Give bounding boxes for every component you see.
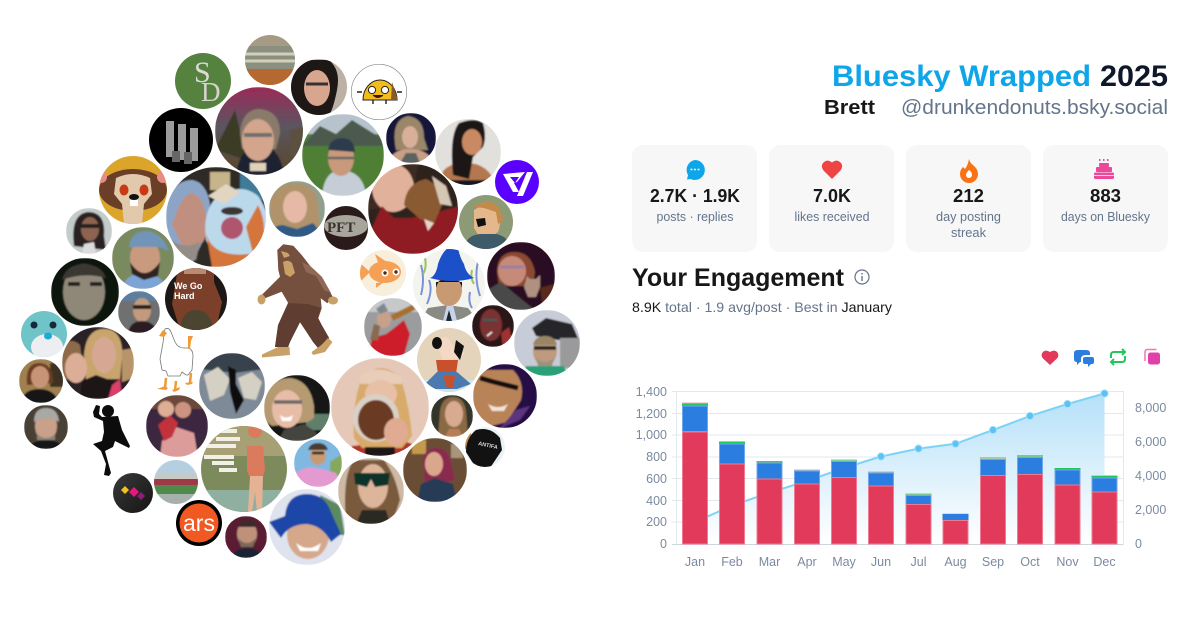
bar: Nov (1054, 468, 1080, 544)
engagement chart (636, 385, 1166, 569)
avatar: stadium (154, 460, 198, 504)
stat card: likes received (769, 145, 894, 252)
bar: Jul (906, 494, 932, 544)
avatar: red haired woman (403, 438, 467, 502)
month labels: May (832, 555, 857, 569)
avatar: goldfish (360, 250, 406, 296)
avatar: dark haired woman (435, 119, 501, 186)
avatar cloud (19, 35, 580, 565)
avatar: Darth Vader pin-up silhouette (93, 405, 130, 476)
stat card: day posting streak (906, 145, 1031, 252)
avatar: We Go Hard: Hard (174, 291, 195, 301)
avatar: woman under aurora (215, 87, 305, 175)
avatar: Underdog cartoon (417, 328, 481, 392)
avatar: blonde woman (386, 113, 436, 163)
avatar: two blonde women (62, 327, 134, 399)
avatar: We Go Hard (165, 268, 227, 330)
avatar: SD monogram (175, 53, 231, 109)
line markers (877, 390, 1108, 460)
bar: May (831, 460, 857, 544)
avatar: white goose (157, 328, 193, 392)
month labels: Jun (871, 555, 891, 569)
stat card: days on Bluesky (1043, 145, 1168, 252)
left axis labels (636, 385, 667, 551)
stat card: likes received: likes received (794, 210, 870, 224)
title: 2025 (1100, 60, 1168, 93)
bar: Aug (942, 514, 968, 544)
avatar: young woman (431, 395, 473, 437)
icon: legend likes (1042, 351, 1058, 365)
right axis labels: 2,000 (1135, 503, 1166, 517)
bar: Jan (682, 402, 708, 544)
right axis labels: 4,000 (1135, 469, 1166, 483)
avatar: smiling man purple light (473, 364, 537, 428)
bar: Oct (1017, 455, 1043, 544)
avatar: ars logo: ars (183, 510, 215, 536)
stat card: posts and replies: 2.7K · 1.9K (650, 186, 740, 206)
left axis labels: 600 (646, 472, 667, 486)
left axis labels: 1,000 (636, 428, 667, 442)
bar: Sep (980, 457, 1006, 544)
avatar: man and cat (487, 242, 555, 310)
month labels: Feb (721, 555, 743, 569)
month labels: Aug (944, 555, 967, 569)
icon: speech bubble (687, 160, 705, 180)
stat card: likes received: 7.0K (813, 186, 851, 206)
stat card: posts and replies: posts · replies (656, 210, 734, 224)
avatar: SD monogram: S (194, 56, 211, 89)
title: Bluesky Wrapped (832, 60, 1091, 93)
icon: heart (822, 161, 842, 179)
stat card: day posting streak: streak (951, 226, 987, 240)
avatar: blonde woman in denim (269, 181, 325, 237)
avatar: cartoon man (459, 195, 513, 249)
heading: Your Engagement: Your Engagement (632, 264, 845, 292)
avatar: drinking in red coat (364, 298, 422, 356)
avatar: retro pin-up meme (201, 424, 287, 512)
avatar: man in blue hat (269, 489, 345, 565)
bar: Feb (719, 441, 745, 544)
chart legend (1042, 349, 1160, 367)
left axis labels: 1,400 (636, 385, 667, 399)
month labels: Oct (1020, 555, 1040, 569)
icon: flame (960, 159, 978, 183)
bar: Mar (756, 461, 782, 544)
stat card: days on Bluesky: 883 (1090, 186, 1121, 206)
avatar: man with clown statue (166, 167, 270, 267)
avatar: man in cap (112, 227, 174, 289)
avatar: stone art (199, 353, 265, 419)
right axis labels (1135, 401, 1166, 551)
left axis labels: 800 (646, 450, 667, 464)
icon: cake (1094, 159, 1114, 179)
month labels: Jan (685, 555, 705, 569)
avatar: woman in big sunglasses (338, 458, 404, 524)
right axis labels: 0 (1135, 537, 1142, 551)
icon: info (855, 270, 869, 284)
stat card: posts and replies (632, 145, 757, 252)
left axis labels: 1,200 (636, 407, 667, 421)
avatar: cartoon rat (95, 156, 169, 224)
left axis labels: 0 (660, 537, 667, 551)
month labels: Mar (759, 555, 780, 569)
avatar: man in floral shirt (294, 439, 342, 487)
avatar: man in mountains (302, 114, 384, 196)
icon: legend replies (1074, 350, 1094, 367)
avatar: smiling woman with glasses (264, 375, 330, 441)
avatar: sepia portrait (51, 258, 119, 326)
avatar: PFT badge (324, 206, 368, 250)
stat card: days on Bluesky: days on Bluesky (1061, 210, 1151, 224)
avatar: bigfoot illustration (258, 244, 338, 358)
month labels: Nov (1056, 555, 1079, 569)
month labels: Dec (1093, 555, 1116, 569)
avatar: older woman (19, 359, 64, 403)
profile name and handle: @drunkendonuts.bsky.social (901, 97, 1168, 119)
avatar: PFT badge: PFT (327, 220, 355, 236)
stat card: day posting streak: day posting (936, 210, 1001, 224)
icon: legend quotes (1145, 350, 1160, 364)
month labels: Sep (982, 555, 1004, 569)
month labels: Jul (911, 555, 926, 569)
engagement summary: 8.9K total · 1.9 avg/post · Best in January (632, 299, 892, 315)
avatar: bearded man with glasses (225, 516, 267, 558)
avatar: building (245, 35, 295, 85)
avatar: black hat (465, 427, 505, 468)
left axis labels: 200 (646, 515, 667, 529)
cumulative line (695, 394, 1104, 522)
avatar: woman in sunglasses (66, 208, 112, 254)
bar: Jun (868, 472, 894, 544)
avatar: blue bear (21, 311, 67, 360)
avatar: man with statue (514, 310, 580, 376)
avatar: SD monogram: D (201, 77, 220, 107)
avatar: woman with dog (368, 164, 460, 254)
cumulative area (695, 394, 1104, 544)
avatar: blonde woman with mug (331, 358, 429, 456)
icon: legend reposts (1111, 349, 1125, 365)
month labels: Apr (797, 555, 817, 569)
avatar: ars logo (176, 500, 222, 546)
avatar: taco (351, 64, 407, 120)
avatar: We Go Hard: We Go (174, 281, 203, 291)
avatar: man in sunglasses (118, 291, 160, 333)
avatar: grey haired man (24, 405, 68, 449)
left axis labels: 400 (646, 494, 667, 508)
avatar: black W logo (149, 108, 213, 172)
stacked bars (682, 402, 1118, 544)
avatar: woman with cigarette (472, 305, 514, 347)
right axis labels: 6,000 (1135, 435, 1166, 449)
right axis labels: 8,000 (1135, 401, 1166, 415)
avatar: diamonds logo (113, 473, 153, 513)
avatar: black hat: ANTIFA (478, 441, 498, 451)
avatar: woman with glasses (291, 59, 347, 115)
avatar: mother and child (146, 395, 208, 457)
stat card: day posting streak: 212 (953, 186, 984, 206)
bar: Dec (1092, 475, 1118, 544)
bar: Apr (794, 470, 820, 544)
avatar: man in party hat (413, 248, 485, 321)
profile name and handle: Brett (824, 97, 875, 119)
avatar: purple V logo (495, 160, 539, 204)
grid lines (672, 391, 1124, 544)
month labels (685, 555, 1116, 569)
